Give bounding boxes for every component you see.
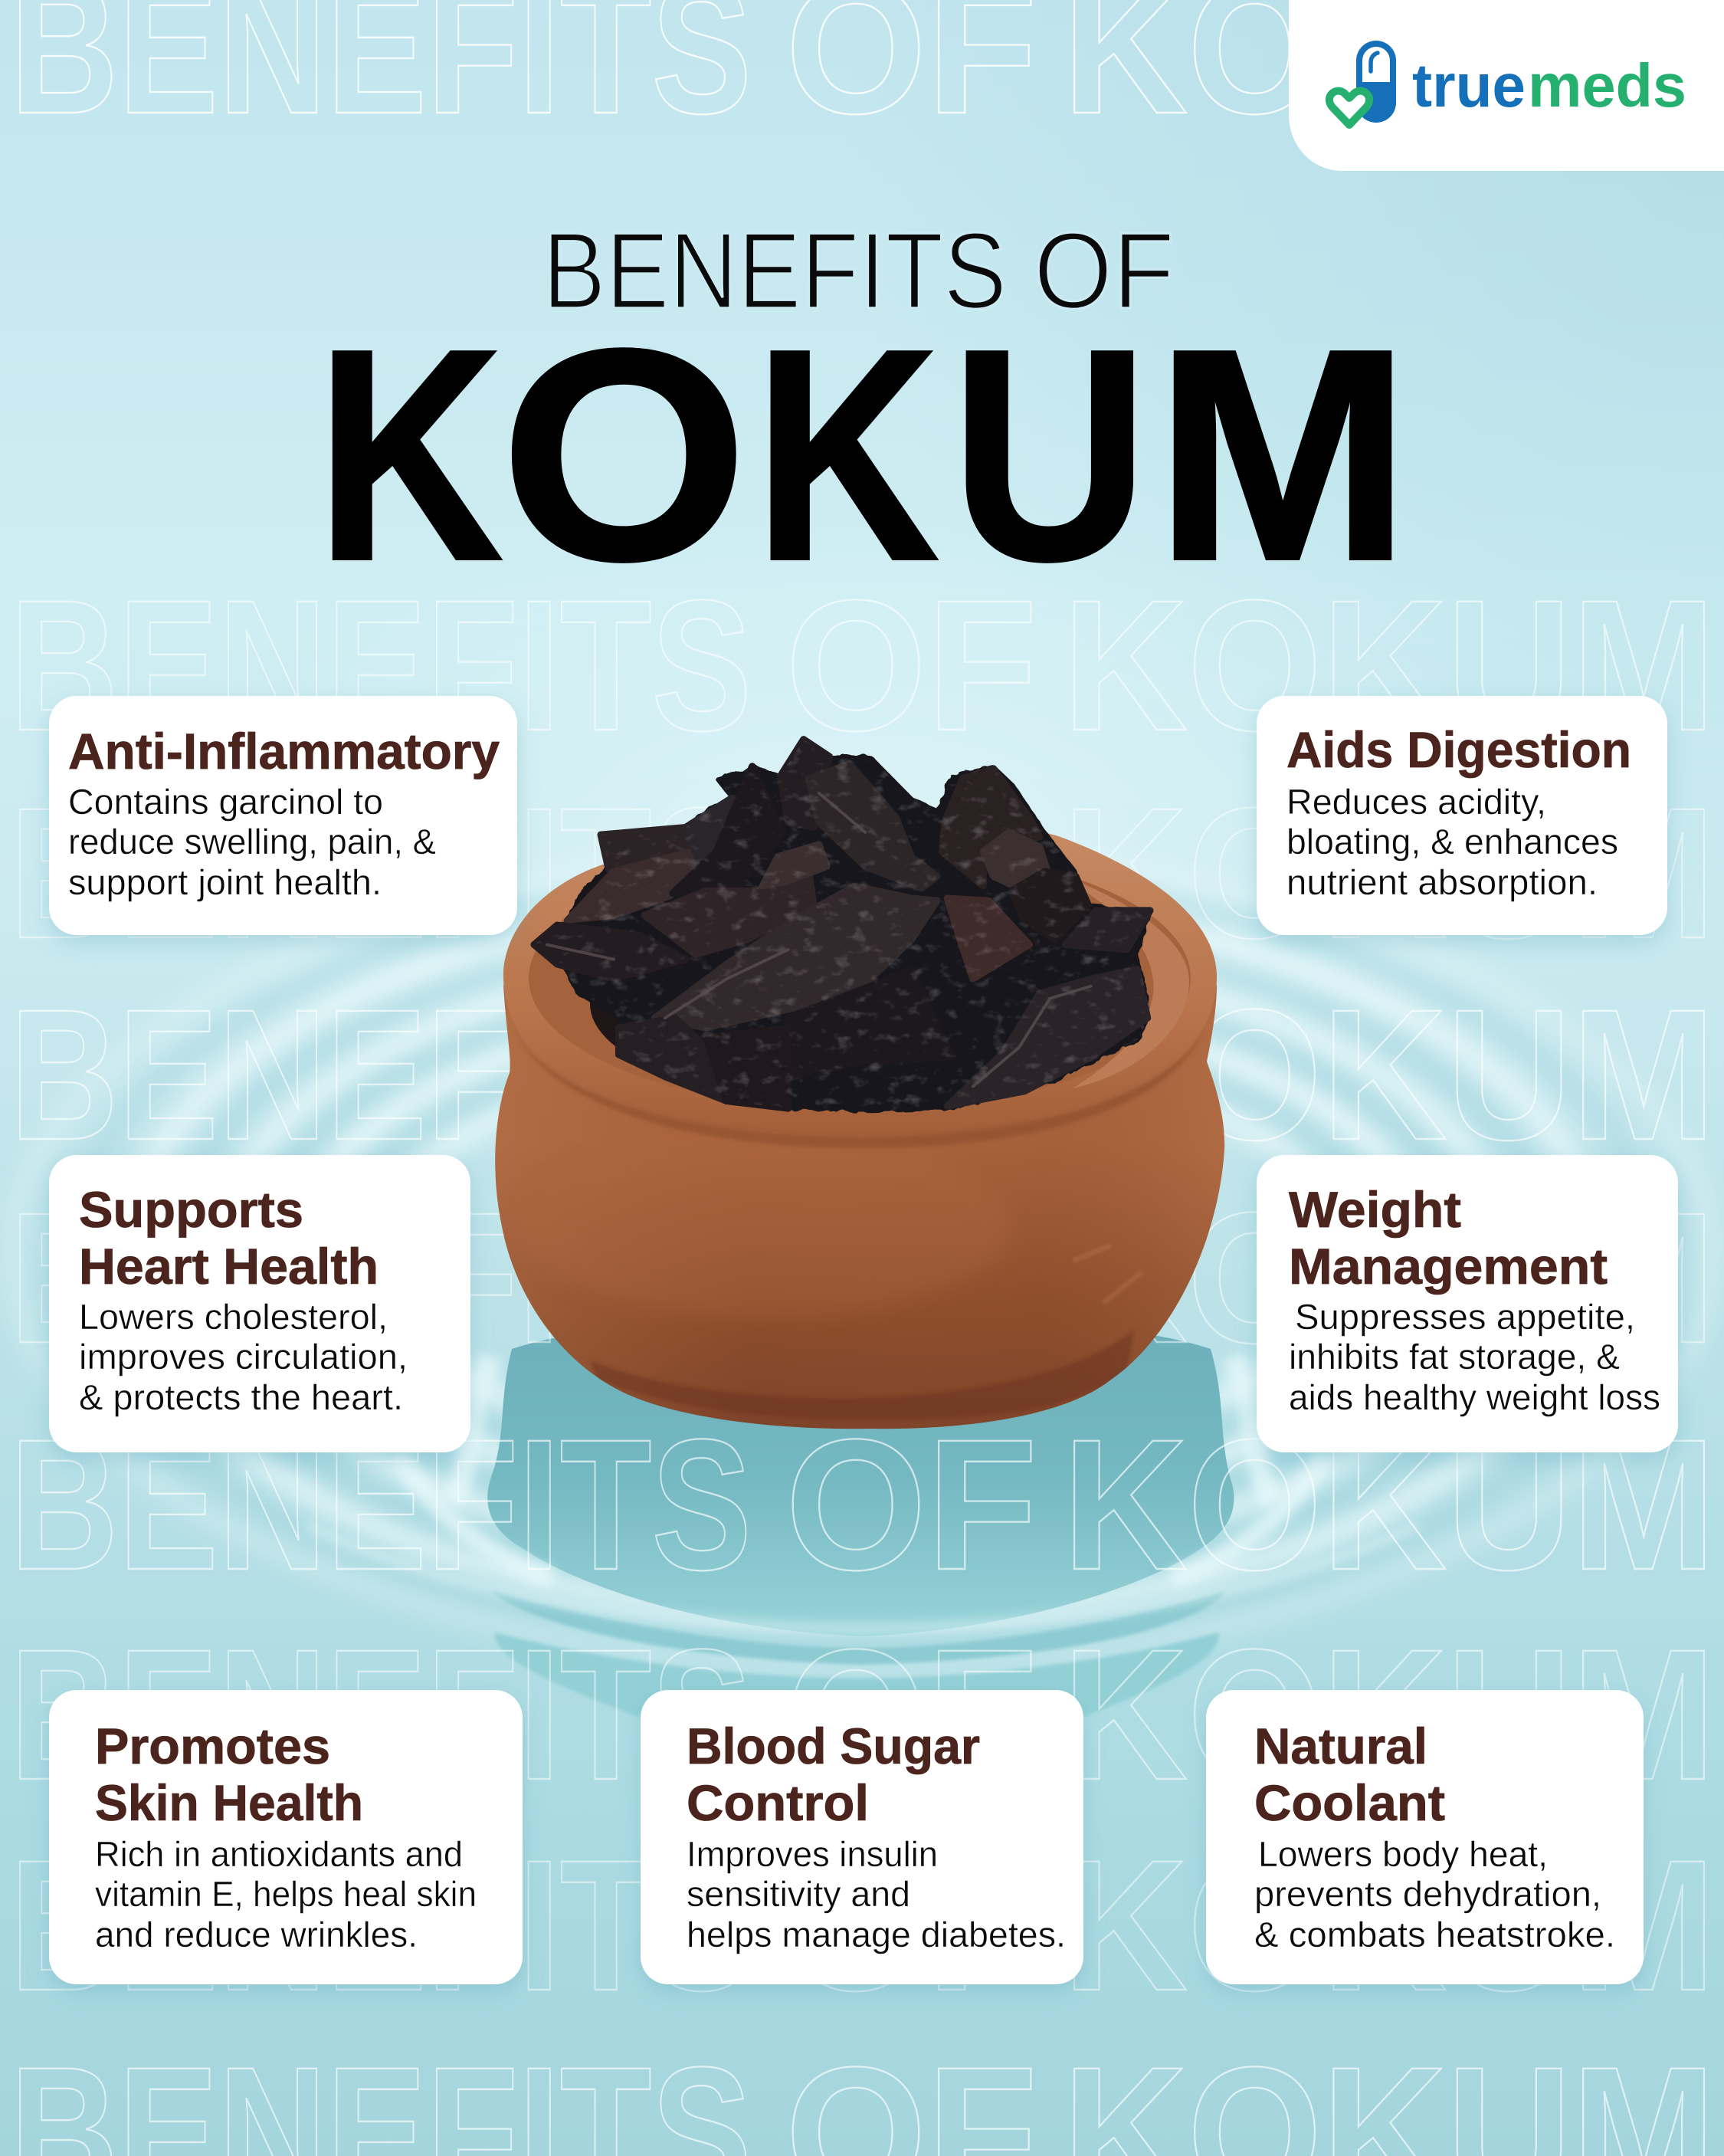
wordmark: truemeds: meds — [1528, 51, 1686, 120]
heading: Blood Sugar — [687, 1718, 980, 1774]
card background — [1257, 1155, 1678, 1452]
body text: support joint health. — [68, 862, 382, 902]
panel: Supports Heart Health — [49, 1155, 470, 1452]
title — [316, 210, 1411, 623]
body text: Contains garcinol to — [68, 782, 383, 822]
body text: Lowers cholesterol, — [79, 1297, 388, 1337]
body text: vitamin E, helps heal skin — [95, 1874, 477, 1914]
heading: Skin Health — [95, 1774, 363, 1831]
body text: Lowers body heat, — [1258, 1834, 1548, 1874]
title line: KOKUM: O — [500, 287, 748, 623]
water ripples — [11, 851, 1713, 1663]
body text: and reduce wrinkles. — [95, 1915, 418, 1954]
heading: Promotes — [95, 1718, 330, 1774]
heading: Coolant — [1254, 1774, 1445, 1831]
panel: Aids Digestion — [1257, 696, 1667, 935]
icon: capsule — [1356, 41, 1396, 123]
outlined background text rows: OF — [785, 562, 1037, 770]
outlined background text rows: OF — [785, 1174, 1037, 1382]
outlined background text rows: BENEFITS — [10, 1401, 752, 1609]
title line: KOKUM: M — [1155, 287, 1411, 623]
body text: & protects the heart. — [79, 1377, 403, 1417]
heading — [1254, 1718, 1445, 1831]
wordmark: truemeds: true — [1412, 51, 1526, 120]
body text — [1254, 1834, 1615, 1954]
body text — [95, 1834, 477, 1954]
panel: Weight Management — [1257, 1155, 1678, 1452]
outlined background text rows: BENEFITS — [10, 1822, 752, 2030]
heading — [79, 1181, 379, 1295]
panel: Promotes Skin Health — [49, 1690, 523, 1984]
title line: KOKUM — [316, 287, 1411, 623]
title line: BENEFITS OF: OF — [1034, 210, 1175, 332]
body text: helps manage diabetes. — [687, 1915, 1066, 1954]
illustration: clay bowl of dried kokum — [495, 734, 1224, 1429]
body text: bloating, & enhances — [1286, 822, 1618, 861]
card background — [1257, 696, 1667, 935]
outlined background text rows: BENEFITS — [10, 562, 752, 770]
heading: Weight — [1289, 1181, 1461, 1238]
outlined background text rows: OF — [785, 770, 1037, 977]
body text: Improves insulin — [687, 1834, 938, 1874]
title line: KOKUM: K — [316, 287, 503, 623]
body text: Reduces acidity, — [1286, 782, 1546, 822]
bowl rim — [503, 826, 1217, 1148]
body text: Rich in antioxidants and — [95, 1834, 463, 1874]
outlined background text rows: OF — [785, 1822, 1037, 2030]
body text: reduce swelling, pain, & — [68, 822, 436, 861]
body text — [79, 1297, 408, 1417]
heading: Aids Digestion — [1286, 721, 1631, 778]
heading — [1289, 1181, 1608, 1295]
body text — [687, 1834, 1066, 1954]
outlined background text rows: BENEFITS — [10, 770, 752, 977]
body text: sensitivity and — [687, 1874, 910, 1914]
bowl reflection in water — [306, 1314, 1418, 1721]
heading: Control — [687, 1774, 869, 1831]
title line: KOKUM: U — [951, 287, 1149, 623]
logo panel: truemeds — [1289, 0, 1724, 171]
title line: BENEFITS OF: BENEFITS — [542, 210, 1007, 332]
card background — [1206, 1690, 1644, 1984]
card background — [49, 696, 517, 935]
dried kokum pile — [526, 734, 1158, 1116]
body text: improves circulation, — [79, 1337, 408, 1377]
body text: nutrient absorption. — [1286, 862, 1598, 902]
outlined background text rows: OF — [785, 1401, 1037, 1609]
body text: & combats heatstroke. — [1254, 1915, 1615, 1954]
outlined background text rows: OF — [785, 971, 1037, 1179]
panel: Blood Sugar Control — [641, 1690, 1083, 1984]
heading — [687, 1718, 980, 1831]
body text: Suppresses appetite, — [1295, 1297, 1635, 1337]
panel: Natural Coolant — [1206, 1690, 1644, 1984]
icon: heart — [1329, 91, 1369, 125]
heading — [95, 1718, 363, 1831]
panel: Anti-Inflammatory — [49, 696, 517, 935]
body text — [68, 782, 436, 902]
body text — [1286, 782, 1618, 902]
body text — [1289, 1297, 1660, 1417]
body text: prevents dehydration, — [1254, 1874, 1601, 1914]
logo background — [1289, 0, 1724, 171]
heading: Natural — [1254, 1718, 1427, 1774]
heading: Management — [1289, 1238, 1608, 1295]
title line: KOKUM: K — [755, 287, 939, 623]
heading: Supports — [79, 1181, 303, 1238]
card background — [641, 1690, 1083, 1984]
wordmark: truemeds — [1412, 51, 1686, 120]
card background — [49, 1690, 523, 1984]
outlined background text rows: BENEFITS — [10, 971, 752, 1179]
outlined background text rows: OF — [785, 1611, 1037, 1819]
outlined background text rows: BENEFITS — [10, 1174, 752, 1382]
heading: Anti-Inflammatory — [68, 723, 500, 779]
body text: inhibits fat storage, & — [1289, 1337, 1620, 1377]
outlined background text rows: BENEFITS — [10, 1611, 752, 1819]
bowl body — [495, 985, 1224, 1429]
card background — [49, 1155, 470, 1452]
body text: aids healthy weight loss — [1289, 1377, 1660, 1417]
heading: Heart Health — [79, 1238, 379, 1295]
